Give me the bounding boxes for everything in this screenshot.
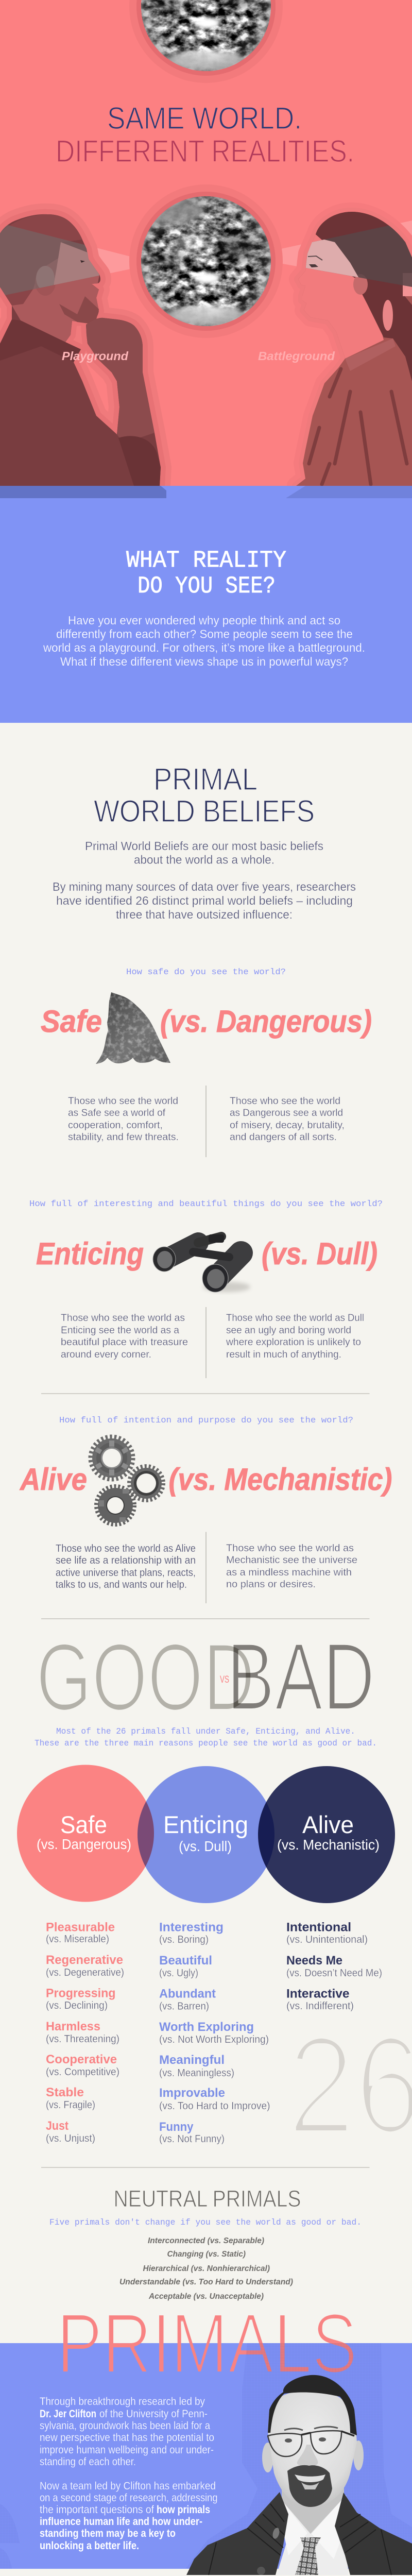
- item: interesting: Interesting: [159, 1921, 224, 1934]
- text: dull description: result in much of anything.: [226, 1349, 341, 1360]
- item: cooperative: (vs. Competitive): [46, 2066, 119, 2078]
- list: neutral primals: [119, 2236, 293, 2301]
- label: enticing circle: Enticing: [163, 1811, 248, 1838]
- heading: what reality do you see: [126, 547, 286, 600]
- heading: neutral primals: NEUTRAL PRIMALS: [113, 2185, 301, 2212]
- panel: alive vs mechanistic: [19, 1416, 392, 1619]
- text: alive description: active universe that plans, reacts,: [56, 1567, 196, 1579]
- text block: research paragraph one: Through breakthrough research led by: [40, 2396, 205, 2408]
- item: meaningful: (vs. Meaningless): [159, 2067, 234, 2079]
- text block: definition: Primal World Beliefs are our most basic beliefs: [85, 839, 323, 853]
- text: mechanistic description: [226, 1543, 357, 1590]
- label: safe circle: [37, 1811, 131, 1852]
- item: intentional: (vs. Unintentional): [286, 1934, 368, 1945]
- text block: research paragraph two: Now a team led by Clifton has embarked: [40, 2480, 216, 2492]
- item: just: [46, 2119, 95, 2144]
- label: enticing circle: (vs. Dull): [179, 1838, 232, 1854]
- panel: hero: [0, 0, 412, 486]
- item: interactive: [286, 1987, 354, 2012]
- text: dangerous description: and dangers of all sorts.: [230, 1132, 337, 1143]
- item: interesting: [159, 1921, 224, 1945]
- list: enticing primals: [159, 1921, 270, 2145]
- icon: gears: [91, 1437, 163, 1524]
- text: dull description: see an ugly and boring world: [226, 1325, 351, 1336]
- item: improvable: Improvable: [159, 2086, 225, 2100]
- heading: safe vs dangerous: (vs. Dangerous): [160, 1004, 372, 1039]
- label: alive circle: Alive: [302, 1811, 354, 1838]
- item: stable: Stable: [46, 2086, 84, 2099]
- text: safe description: as Safe see a world of: [68, 1108, 166, 1118]
- sight beam: woman: [282, 221, 412, 266]
- item: worth exploring: Worth Exploring: [159, 2020, 254, 2034]
- item: funny: Funny: [159, 2120, 194, 2134]
- item: interesting: (vs. Boring): [159, 1934, 209, 1945]
- text: alive description: Those who see the world as Alive: [56, 1543, 196, 1554]
- item: abundant: (vs. Barren): [159, 2001, 209, 2012]
- text: neutral explanation: Five primals don't change if you see the world as good or bad.: [49, 2217, 362, 2227]
- text: dangerous description: Those who see the world: [230, 1096, 340, 1107]
- text: enticing description: around every corner.: [61, 1349, 151, 1360]
- figure: woman in profile: [296, 212, 412, 486]
- heading: enticing vs dull: (vs. Dull): [262, 1236, 377, 1271]
- item: regenerative: Regenerative: [46, 1953, 123, 1967]
- text block: research paragraph one: [40, 2396, 214, 2468]
- heading: alive vs mechanistic: (vs. Mechanistic): [169, 1462, 392, 1497]
- item: harmless: Harmless: [46, 2020, 100, 2033]
- text block: research paragraph two: unlocking a better life.: [40, 2540, 139, 2552]
- text block: definition: [53, 839, 356, 921]
- item: needs me: [286, 1954, 382, 1979]
- off-white strip under bio: [0, 2569, 186, 2576]
- label: safe circle: Safe: [60, 1811, 107, 1838]
- item: funny: (vs. Not Funny): [159, 2133, 225, 2145]
- icon: central earth: [129, 184, 283, 338]
- item: worth exploring: [159, 2020, 269, 2045]
- item: abundant: [159, 1987, 216, 2012]
- label: playground: Playground: [62, 349, 129, 363]
- text: dull description: [226, 1313, 364, 1360]
- question: how full of intention: How full of intention and purpose do you see the world?: [59, 1416, 353, 1426]
- heading: primal world beliefs: WORLD BELIEFS: [94, 794, 315, 828]
- item: stable: [46, 2086, 95, 2111]
- text: dull description: where exploration is unlikely to: [226, 1337, 361, 1348]
- heading: what reality do you see: DO YOU SEE?: [138, 573, 276, 600]
- text block: research paragraph two: [40, 2480, 217, 2552]
- item: regenerative: [46, 1953, 124, 1978]
- item: beautiful: (vs. Ugly): [159, 1968, 198, 1979]
- text block: research paragraph one: Dr. Jer Clifton: [40, 2408, 96, 2420]
- text: alive description: talks to us, and wants our help.: [56, 1579, 187, 1590]
- text: enticing description: beautiful place with treasure: [61, 1337, 188, 1348]
- figure shadows spilling into blue band: [0, 486, 412, 498]
- item: interactive: (vs. Indifferent): [286, 2001, 354, 2012]
- icon: top earth: [129, 0, 283, 83]
- text: mechanistic description: no plans or desires.: [226, 1579, 316, 1590]
- list: neutral primals: Hierarchical (vs. Nonhierarchical): [143, 2264, 270, 2273]
- item: meaningful: [159, 2053, 234, 2079]
- text block: research paragraph two: how primals: [157, 2504, 210, 2516]
- text block: definition: three that have outsized influence:: [116, 908, 293, 921]
- title: same world different realities: DIFFERENT REALITIES.: [56, 134, 354, 168]
- text block: definition: have identified 26 distinct primal world beliefs – including: [56, 894, 353, 907]
- item: intentional: [286, 1921, 368, 1945]
- panel: neutral primals: [49, 2185, 362, 2301]
- list: neutral primals: Changing (vs. Static): [167, 2250, 246, 2259]
- text block: research paragraph one: sylvania, groundwork has been laid for a: [40, 2420, 210, 2432]
- text: enticing description: [61, 1313, 188, 1360]
- item: interactive: Interactive: [286, 1987, 349, 2001]
- text: dangerous description: of misery, decay, brutality,: [230, 1120, 345, 1131]
- text block: definition: about the world as a whole.: [134, 853, 274, 867]
- text block: intro question: [43, 614, 365, 668]
- item: stable: (vs. Fragile): [46, 2099, 95, 2111]
- item: improvable: [159, 2086, 270, 2112]
- text block: research paragraph two: on a second stage of research, addressing: [40, 2492, 217, 2504]
- heading: safe vs dangerous: [41, 1004, 372, 1039]
- title: same world different realities: SAME WORLD.: [107, 101, 302, 135]
- text block: intro question: What if these different views shape us in powerful ways?: [60, 655, 348, 668]
- label: enticing circle: [163, 1811, 248, 1854]
- item: just: Just: [46, 2119, 68, 2133]
- panel: researcher bio: [0, 2296, 412, 2575]
- question: how safe: How safe do you see the world?: [126, 968, 286, 977]
- text: dull description: Those who see the world as Dull: [226, 1313, 364, 1324]
- text block: definition: By mining many sources of data over five years, researchers: [53, 880, 356, 893]
- text block: research paragraph one: of the University of Penn-: [99, 2408, 208, 2420]
- text: mechanistic description: Mechanistic see the universe: [226, 1555, 357, 1566]
- item: harmless: [46, 2020, 119, 2045]
- text: mechanistic description: as a mindless machine with: [226, 1567, 352, 1578]
- list: safe primals: [46, 1921, 124, 2144]
- item: abundant: Abundant: [159, 1987, 216, 2001]
- heading: what reality do you see: WHAT REALITY: [126, 547, 286, 574]
- portrait: dr jer clifton: [186, 2375, 412, 2575]
- figure: man in profile: [0, 214, 161, 486]
- label: vs: VS: [220, 1674, 229, 1685]
- item: cooperative: [46, 2053, 119, 2078]
- item: needs me: (vs. Doesn’t Need Me): [286, 1968, 382, 1979]
- text block: intro question: differently from each other? Some people seem to see the: [56, 628, 353, 641]
- item: pleasurable: [46, 1921, 115, 1945]
- sight beam: man: [97, 248, 130, 273]
- text block: research paragraph one: new perspective that has the potential to: [40, 2432, 214, 2444]
- item: meaningful: Meaningful: [159, 2053, 225, 2067]
- list: neutral primals: Acceptable (vs. Unacceptable): [148, 2292, 264, 2301]
- item: pleasurable: (vs. Miserable): [46, 1934, 109, 1945]
- label: alive circle: [277, 1811, 380, 1853]
- heading: alive vs mechanistic: [19, 1462, 392, 1497]
- text: mechanistic description: Those who see the world as: [226, 1543, 354, 1554]
- panel: safe vs dangerous: [41, 968, 372, 1157]
- item: funny: [159, 2120, 225, 2145]
- text block: research paragraph two: influence human life and how under-: [40, 2516, 202, 2528]
- text block: research paragraph one: standing of each other.: [40, 2456, 136, 2468]
- label: safe circle: (vs. Dangerous): [37, 1836, 131, 1852]
- item: needs me: Needs Me: [286, 1954, 342, 1968]
- text block: research paragraph two: the important questions of: [40, 2504, 154, 2516]
- text: dangerous description: as Dangerous see a world: [230, 1108, 343, 1118]
- text: safe description: Those who see the world: [68, 1096, 178, 1107]
- heading: good: GOOD: [36, 1624, 255, 1731]
- text: enticing description: Enticing see the world as a: [61, 1325, 179, 1336]
- panel: primal world beliefs intro: [53, 762, 356, 921]
- text: safe description: [68, 1096, 179, 1143]
- portrait ghost halftone: [0, 2343, 412, 2569]
- list: neutral primals: Understandable (vs. Too Hard to Understand): [119, 2278, 293, 2286]
- item: cooperative: Cooperative: [46, 2053, 117, 2066]
- heading: primal world beliefs: PRIMAL: [153, 762, 258, 796]
- text block: research paragraph one: improve human wellbeing and our under-: [40, 2444, 214, 2456]
- text: alive description: see life as a relationship with an: [56, 1554, 196, 1566]
- label: battleground: Battleground: [258, 349, 335, 363]
- item: improvable: (vs. Too Hard to Improve): [159, 2100, 270, 2112]
- item: regenerative: (vs. Degenerative): [46, 1967, 124, 1978]
- question: how full of interesting: How full of interesting and beautiful things do you see the world?: [29, 1199, 383, 1209]
- item: progressing: [46, 1987, 115, 2011]
- text: alive description: [56, 1543, 196, 1590]
- item: intentional: Intentional: [286, 1921, 351, 1934]
- text: safe description: stability, and few threats.: [68, 1132, 179, 1143]
- text block: research paragraph two: standing them may be a key to: [40, 2528, 176, 2539]
- text: enticing description: Those who see the world as: [61, 1313, 185, 1324]
- item: harmless: (vs. Threatening): [46, 2033, 119, 2045]
- text block: intro question: Have you ever wondered why people think and act so: [68, 614, 340, 627]
- icon: shark fin: [96, 992, 170, 1064]
- heading: safe vs dangerous: Safe: [41, 1004, 102, 1039]
- heading: alive vs mechanistic: Alive: [19, 1462, 87, 1497]
- heading: enticing vs dull: Enticing: [36, 1236, 144, 1271]
- text block: good or bad explanation: [35, 1726, 377, 1748]
- heading: enticing vs dull: [36, 1236, 377, 1271]
- item: progressing: (vs. Declining): [46, 2000, 108, 2011]
- item: just: (vs. Unjust): [46, 2133, 95, 2144]
- text: safe description: cooperation, comfort,: [68, 1120, 163, 1131]
- heading: primal world beliefs: [94, 762, 315, 828]
- list: neutral primals: Interconnected (vs. Separable): [148, 2236, 264, 2245]
- text block: good or bad explanation: Most of the 26 primals fall under Safe, Enticing, and Alive.: [56, 1726, 355, 1736]
- item: worth exploring: (vs. Not Worth Exploring): [159, 2034, 269, 2045]
- title: same world different realities: [58, 107, 351, 162]
- icon: binoculars: [153, 1234, 250, 1292]
- item: beautiful: [159, 1954, 212, 1979]
- list: alive primals: [286, 1921, 382, 2012]
- text block: good or bad explanation: These are the three main reasons people see the world as good or bad.: [35, 1738, 377, 1748]
- item: progressing: Progressing: [46, 1987, 115, 2000]
- text: dangerous description: [230, 1096, 345, 1143]
- chart: three overlapping circles: [17, 1765, 395, 1903]
- panel: what reality do you see: [0, 486, 412, 668]
- text block: intro question: world as a playground. For others, it’s more like a battleground.: [43, 641, 365, 654]
- item: beautiful: Beautiful: [159, 1954, 212, 1968]
- item: pleasurable: Pleasurable: [46, 1921, 115, 1934]
- panel: good vs bad: [35, 1624, 377, 1748]
- panel: enticing vs dull: [29, 1199, 383, 1394]
- label: alive circle: (vs. Mechanistic): [277, 1837, 380, 1853]
